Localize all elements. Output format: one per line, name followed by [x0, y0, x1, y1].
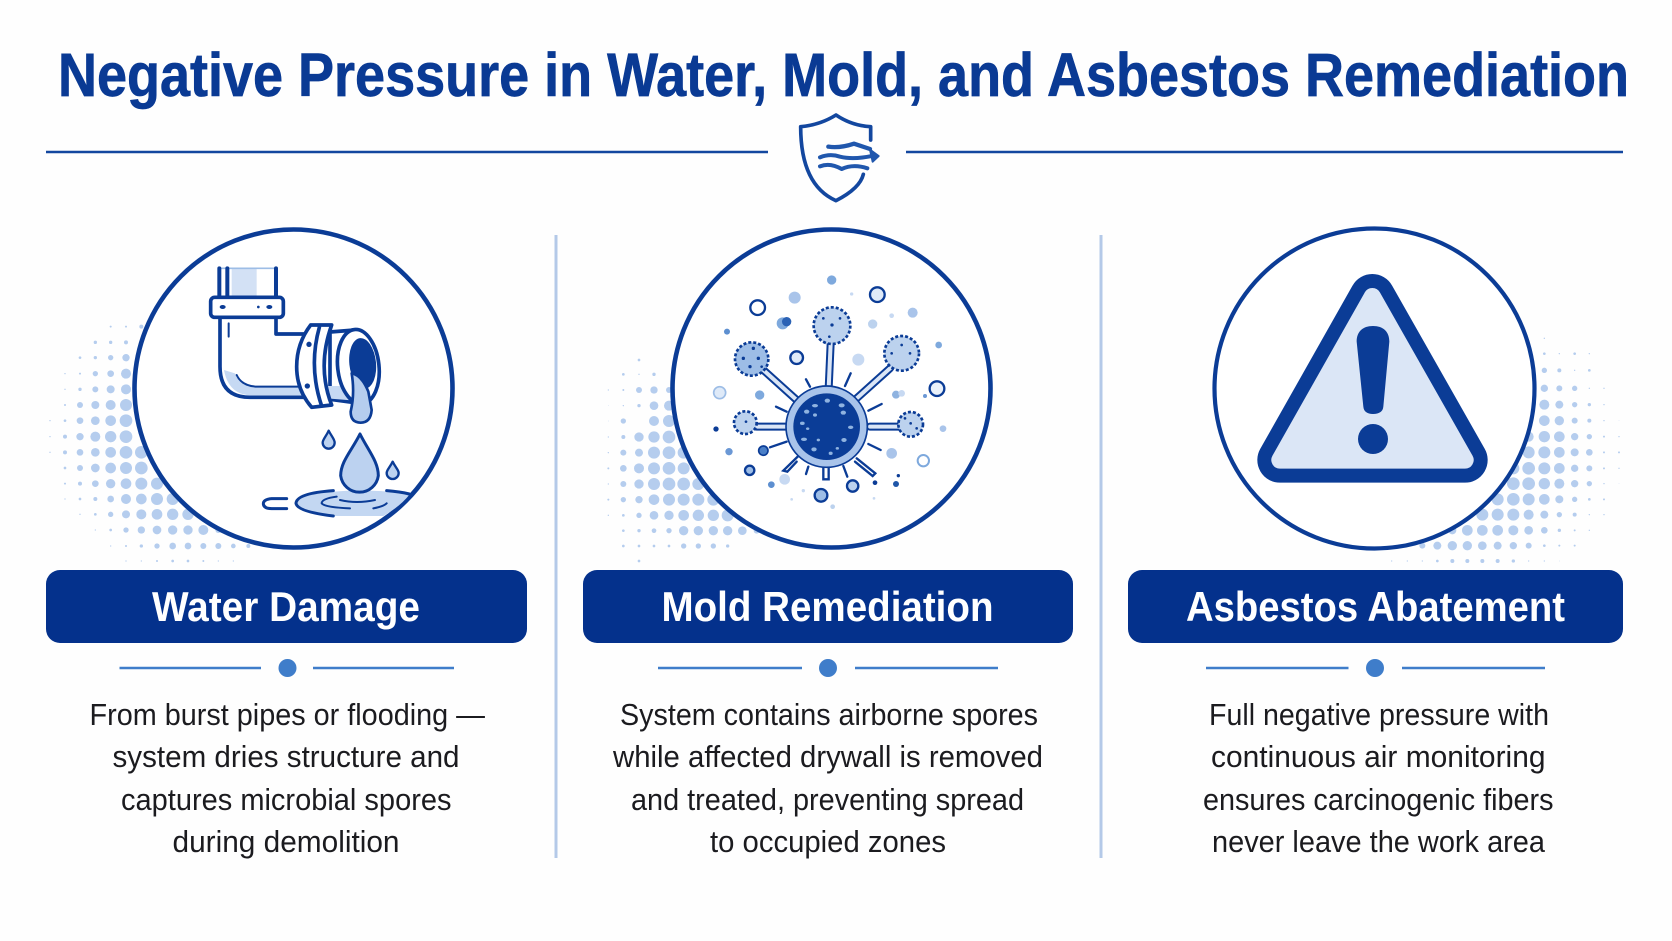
heading: mold remediation: Mold Remediation	[662, 583, 994, 630]
icon: puddle and droplets	[263, 431, 410, 516]
floating spores	[713, 275, 946, 509]
text block: mold remediation: while affected drywall is removed	[612, 739, 1043, 774]
halftone dots: water damage	[49, 325, 250, 562]
text block: asbestos abatement: never leave the work area	[1212, 824, 1546, 859]
halftone dots: mold remediation	[607, 359, 760, 562]
mold heads	[734, 307, 923, 437]
pipe outlet	[330, 330, 355, 403]
mold body	[786, 386, 867, 467]
divider with dot: asbestos abatement	[1206, 659, 1545, 677]
heading: asbestos abatement: Asbestos Abatement	[1186, 583, 1565, 630]
text block: water damage: From burst pipes or flooding —	[90, 697, 485, 732]
text block: water damage: captures microbial spores	[121, 782, 452, 817]
text block: mold remediation: to occupied zones	[710, 824, 946, 859]
pipe collar	[211, 297, 283, 317]
circle frame: asbestos abatement	[1214, 228, 1534, 548]
icon: leaking pipe	[211, 268, 383, 423]
text block: water damage	[90, 697, 485, 859]
text block: asbestos abatement: continuous air monitoring	[1211, 739, 1546, 774]
text block: asbestos abatement	[1203, 697, 1554, 859]
circle frame: mold remediation	[672, 230, 990, 548]
heading: mold remediation	[583, 570, 1073, 643]
divider with dot: water damage	[120, 659, 454, 677]
circle frame: water damage	[134, 230, 452, 548]
text block: mold remediation	[612, 697, 1043, 859]
icon: mold spore	[713, 275, 946, 509]
halftone dots: asbestos abatement	[1391, 338, 1620, 563]
icon: shield with airflow	[801, 115, 879, 201]
mold stalks	[757, 343, 898, 427]
text block: asbestos abatement: Full negative pressure with	[1209, 697, 1549, 732]
divider with dot: mold remediation	[658, 659, 998, 677]
mold short spikes	[770, 373, 882, 479]
text block: water damage: system dries structure and	[112, 739, 460, 774]
heading: water damage: Water Damage	[152, 583, 420, 630]
text block: water damage: during demolition	[172, 824, 400, 859]
text block: asbestos abatement: ensures carcinogenic fibers	[1203, 782, 1554, 817]
text block: mold remediation: and treated, preventing spread	[631, 782, 1024, 817]
heading: asbestos abatement	[1128, 570, 1623, 643]
icon: warning triangle	[1264, 281, 1481, 476]
heading: water damage	[46, 570, 527, 643]
panel: asbestos abatement	[1214, 228, 1620, 563]
text block: mold remediation: System contains airborne spores	[620, 697, 1038, 732]
panel: mold remediation	[607, 230, 990, 562]
panel: water damage	[49, 230, 452, 562]
